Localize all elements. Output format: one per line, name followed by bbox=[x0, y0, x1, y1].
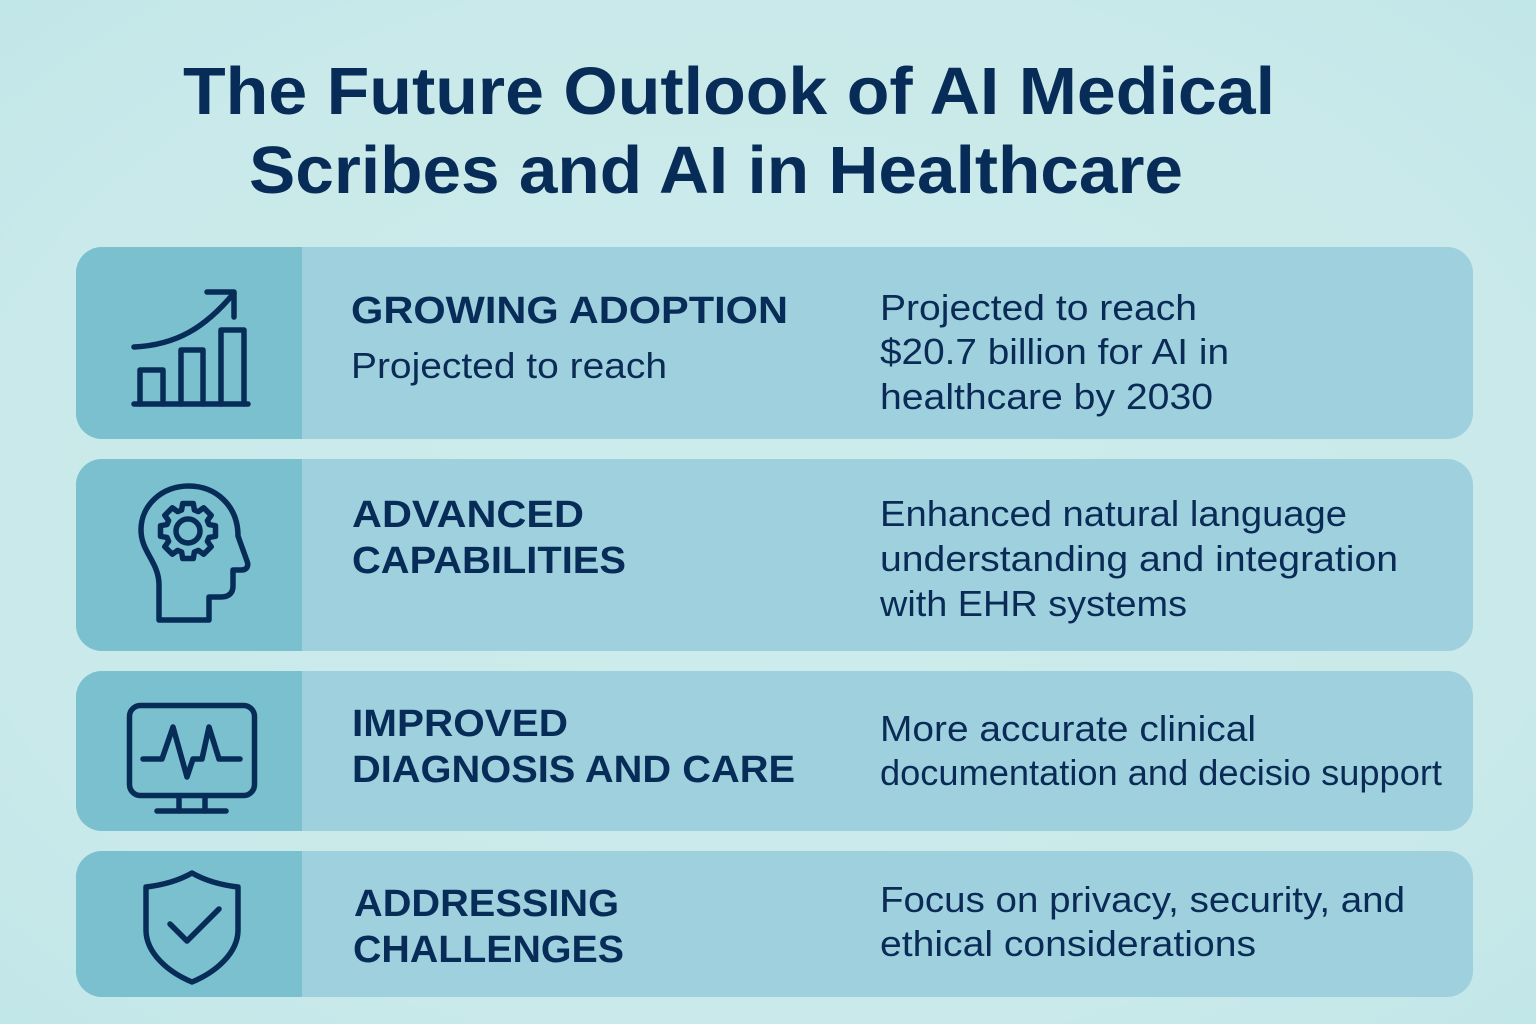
heading: advanced capabilities bbox=[352, 494, 626, 582]
heading: growing adoption bbox=[351, 290, 788, 386]
title bbox=[183, 54, 1275, 208]
description: improved diagnosis and care: More accurate clinical bbox=[880, 708, 1256, 749]
icon tile: advanced capabilities bbox=[76, 459, 302, 651]
heading: improved diagnosis and care bbox=[352, 703, 795, 791]
icon: shield with check bbox=[146, 873, 238, 982]
icon: growth chart with arrow bbox=[134, 292, 248, 404]
icon tile: addressing challenges bbox=[76, 851, 302, 997]
icon tile: improved diagnosis and care bbox=[76, 671, 302, 831]
description: improved diagnosis and care: documentation and decisio support bbox=[880, 752, 1442, 793]
description: advanced capabilities: Enhanced natural language bbox=[880, 493, 1347, 534]
heading: advanced capabilities: ADVANCED bbox=[352, 494, 584, 536]
description: growing adoption: Projected to reach bbox=[880, 287, 1197, 328]
heading: advanced capabilities: CAPABILITIES bbox=[352, 540, 626, 582]
description: growing adoption: healthcare by 2030 bbox=[880, 376, 1213, 417]
description: improved diagnosis and care bbox=[880, 708, 1442, 793]
title: Scribes and AI in Healthcare bbox=[249, 133, 1183, 208]
heading: growing adoption: GROWING ADOPTION bbox=[351, 290, 788, 332]
description: advanced capabilities: with EHR systems bbox=[879, 583, 1187, 624]
icon: head with gear bbox=[141, 486, 248, 620]
panel: advanced capabilities bbox=[76, 459, 1473, 651]
panel: improved diagnosis and care bbox=[76, 671, 1473, 831]
description: addressing challenges: Focus on privacy, security, and bbox=[880, 879, 1405, 920]
description: addressing challenges bbox=[880, 879, 1405, 964]
icon: monitor with heartbeat bbox=[130, 706, 254, 811]
heading: improved diagnosis and care: DIAGNOSIS AND CARE bbox=[352, 749, 795, 791]
description: advanced capabilities: understanding and integration bbox=[880, 538, 1398, 579]
icon tile: growing adoption bbox=[76, 247, 302, 439]
heading: growing adoption: Projected to reach bbox=[351, 345, 667, 386]
panel: growing adoption bbox=[76, 247, 1473, 439]
title: The Future Outlook of AI Medical bbox=[183, 54, 1275, 129]
heading: addressing challenges: ADDRESSING bbox=[354, 883, 619, 925]
description: growing adoption: $20.7 billion for AI in bbox=[880, 331, 1229, 372]
description: growing adoption bbox=[880, 287, 1229, 417]
panel: addressing challenges bbox=[76, 851, 1473, 997]
description: addressing challenges: ethical considerations bbox=[880, 923, 1256, 964]
heading: improved diagnosis and care: IMPROVED bbox=[352, 703, 568, 745]
description: advanced capabilities bbox=[879, 493, 1398, 624]
heading: addressing challenges: CHALLENGES bbox=[353, 929, 624, 971]
heading: addressing challenges bbox=[353, 883, 624, 971]
